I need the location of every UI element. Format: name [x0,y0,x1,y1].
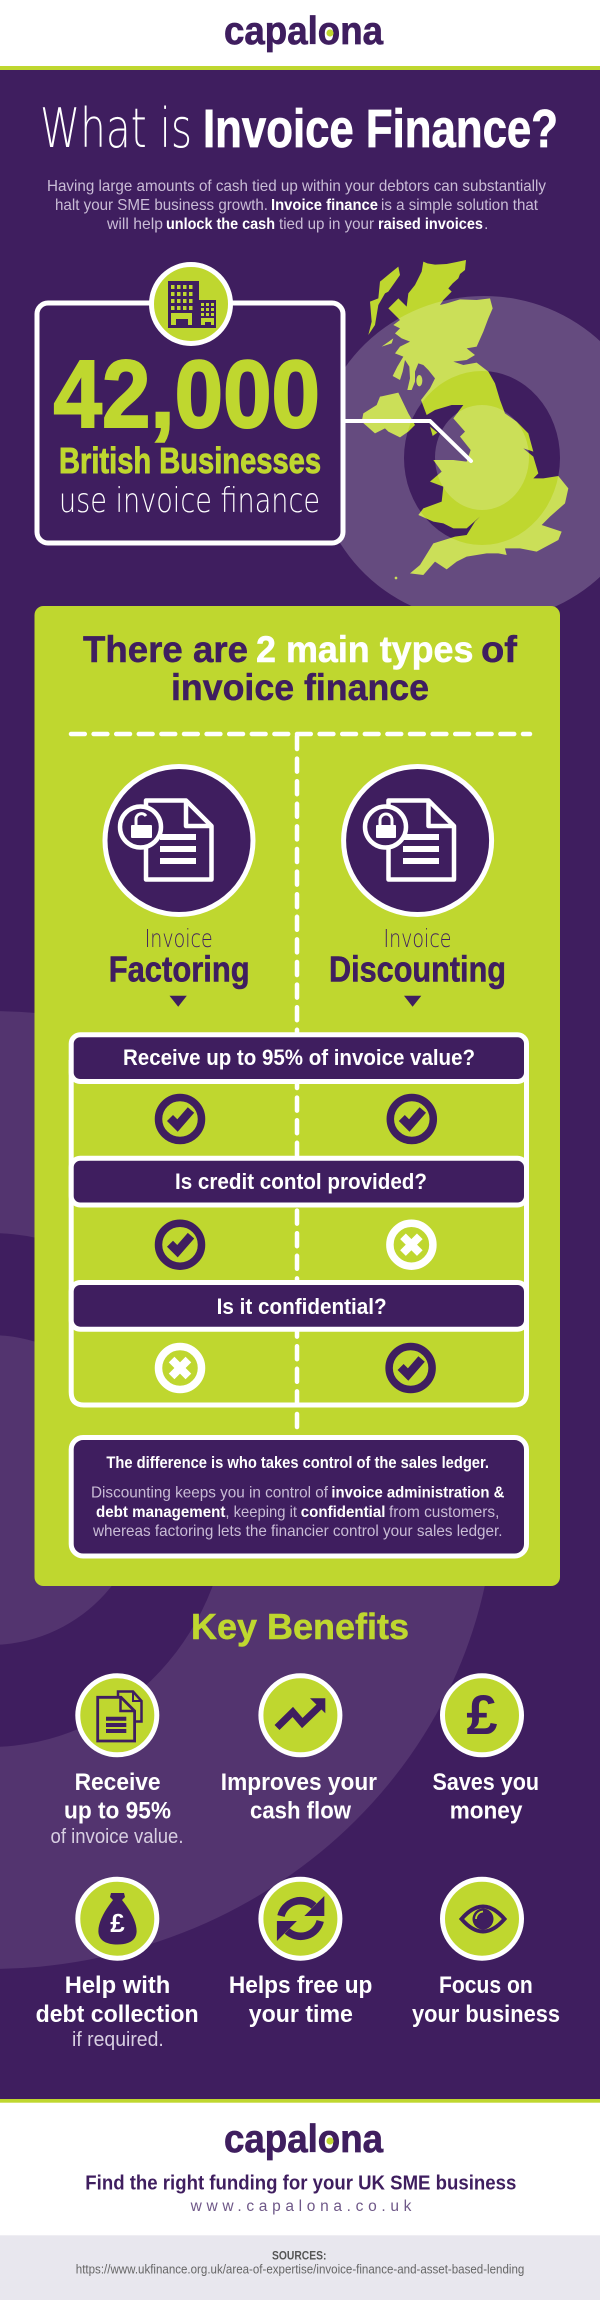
intro text: tied up in your [279,216,375,233]
difference callout: confidential [301,1504,385,1521]
benefit: saves money: money [450,1798,523,1825]
intro text [47,178,546,233]
icon: check discounting row 3 [389,1346,432,1390]
icon: cross discounting row 2 [390,1223,433,1266]
icon: invoice discounting document with closed lock [344,766,492,914]
benefit: receive up to 95%: Receive [75,1769,161,1796]
difference callout [71,1438,526,1556]
difference callout: from customers, [389,1504,499,1521]
sources: SOURCES: [272,2248,326,2262]
benefit: cash flow: Improves your [221,1769,377,1796]
label: invoice discounting [329,924,506,1007]
label: invoice discounting: Discounting [329,948,506,990]
intro text: unlock the cash [166,216,275,233]
icon: check factoring row 1 [158,1098,202,1140]
logo: capalona [224,10,384,53]
difference callout: whereas factoring lets the financier control your sales ledger. [92,1523,503,1540]
stat box [37,264,471,543]
benefit: debt collection: Help with [65,1972,170,1999]
label: invoice factoring: Invoice [145,924,213,953]
stat sublabel: use invoice finance [59,481,320,521]
panel: two types [34,606,560,1586]
title [40,97,558,160]
benefit: receive up to 95%: up to 95% [64,1798,171,1825]
benefit: free up time [229,1879,372,2028]
icon: invoice factoring document with open lock [105,766,253,914]
panel heading [83,629,518,708]
stat figure: 42,000 [54,341,320,448]
sources: https://www.ukfinance.org.uk/area-of-expertise/invoice-finance-and-asset-based-lending [76,2262,524,2276]
row: credit control [71,1158,526,1205]
row: confidential: Is it confidential? [217,1294,387,1319]
icon: rising arrow [261,1676,340,1755]
row: confidential [71,1282,526,1329]
benefit: free up time: your time [249,2001,353,2028]
connector line to map [345,421,471,461]
benefit: debt collection [36,1879,199,2051]
comparison table [71,1035,526,1405]
label: invoice factoring [109,924,250,1007]
benefit: receive up to 95%: of invoice value. [50,1826,184,1848]
benefit: receive up to 95% [50,1676,184,1848]
icon: office buildings [152,264,230,344]
stat label: British Businesses [59,440,321,481]
benefit: debt collection: if required. [72,2029,164,2051]
intro text: Invoice finance [271,197,378,214]
UK map [362,260,568,579]
row: receive up to 95%: Receive up to 95% of invoice value? [123,1045,475,1070]
icon: refresh arrows [261,1879,340,1958]
footer tagline: Find the right funding for your UK SME business [85,2172,516,2194]
benefit: free up time: Helps free up [229,1972,372,1999]
icon: documents [78,1676,157,1755]
benefit: cash flow: cash flow [250,1798,351,1825]
background ring lower left [0,1011,495,1969]
heading: key benefits: Key Benefits [191,1606,409,1647]
panel heading: 2 main types [256,629,474,670]
intro text: will help [106,216,163,233]
icon: money bag: £ [110,1908,125,1938]
icon: money bag [78,1879,157,1958]
intro text: . [484,216,488,233]
icon: check discounting row 1 [390,1098,433,1140]
benefit: saves money [432,1676,539,1825]
difference callout: The difference is who takes control of the sales ledger. [106,1453,489,1472]
intro text: raised invoices [378,216,483,233]
benefit: focus on business: Focus on [439,1972,533,1999]
icon: pound: £ [466,1683,498,1746]
icon: check factoring row 2 [158,1223,202,1266]
benefit: debt collection: debt collection [36,2001,199,2028]
benefit: cash flow [221,1676,377,1825]
icon: eye [442,1879,522,1958]
difference callout: , keeping it [225,1504,298,1521]
row: receive up to 95% [71,1035,526,1082]
sources [0,2235,600,2300]
difference callout: Discounting keeps you in control of [91,1485,329,1502]
difference callout: invoice administration & [331,1485,505,1502]
footer logo: capalona [224,2118,384,2161]
row: credit control: Is credit contol provided? [175,1169,427,1194]
title: What is [40,97,192,160]
panel heading: of [481,629,518,670]
panel heading: invoice finance [171,667,429,708]
label: invoice discounting: Invoice [384,924,452,953]
header [0,0,600,70]
footer [0,2099,600,2236]
benefit: saves money: Saves you [432,1769,539,1796]
intro text: is a simple solution that [381,197,539,214]
benefit: focus on business: your business [412,2001,560,2028]
difference callout: debt management [96,1504,226,1521]
benefit: focus on business [412,1879,560,2028]
icon: pound [442,1676,522,1755]
footer url: www.capalona.co.uk [190,2198,412,2215]
intro text: Having large amounts of cash tied up within your debtors can substantially [47,178,546,195]
panel heading: There are [83,629,248,670]
label: invoice factoring: Factoring [109,949,250,990]
intro text: halt your SME business growth. [55,197,268,214]
map rings [316,296,600,622]
icon: cross factoring row 3 [158,1346,202,1390]
